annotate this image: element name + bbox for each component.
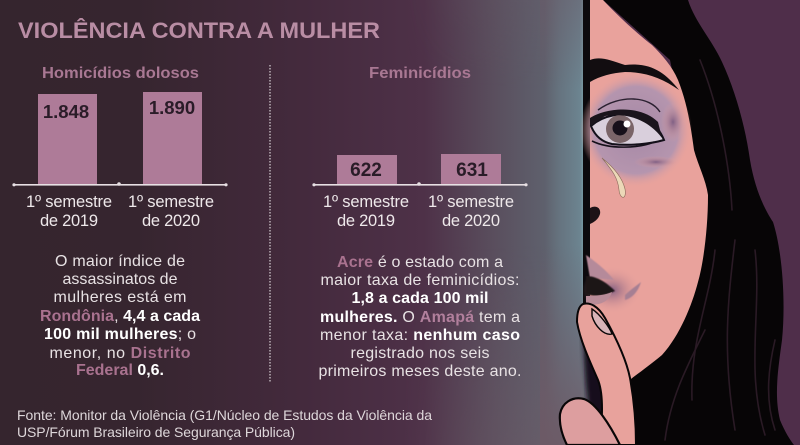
bar chart: 1º semestre — [26, 193, 112, 211]
nose — [590, 207, 600, 224]
text block: menor, no Distrito — [50, 345, 191, 362]
text block: Acre é o estado com a — [337, 254, 503, 271]
bar chart — [312, 154, 528, 230]
text block: Federal 0,6. — [76, 362, 164, 379]
panel: feminicídios — [312, 65, 528, 380]
fingernail — [592, 309, 612, 334]
text block: maior taxa de feminicídios: — [320, 272, 520, 289]
background panel behind illustration — [590, 0, 800, 445]
text block: assassinatos de — [62, 271, 178, 288]
bar chart: 1.890 — [149, 97, 195, 118]
eyebrow — [590, 58, 679, 90]
bar chart: 1º semestre — [428, 193, 514, 211]
text block: registrado nos seis — [350, 345, 490, 362]
bruise under eye — [634, 156, 678, 168]
text block — [40, 253, 200, 379]
bar chart: de 2019 — [337, 212, 395, 230]
heading: Feminicídios — [369, 65, 471, 82]
finger — [577, 304, 636, 445]
hair — [603, 0, 794, 445]
bar chart: de 2020 — [142, 212, 200, 230]
text block: mulheres. O Amapá tem a — [320, 309, 520, 326]
face — [590, 0, 708, 379]
text block: Rondônia, 4,4 a cada — [40, 308, 200, 325]
text block: 1,8 a cada 100 mil — [352, 290, 488, 307]
source note — [17, 407, 432, 440]
bar chart — [12, 92, 228, 230]
eye — [590, 99, 664, 147]
text block: menor taxa: nenhum caso — [320, 327, 520, 344]
divider — [269, 65, 271, 383]
source note: USP/Fórum Brasileiro de Segurança Pública) — [17, 424, 295, 440]
bar chart: 631 — [456, 160, 488, 181]
text block: 100 mil mulheres; o — [44, 326, 196, 343]
door — [540, 0, 590, 445]
mouth with bruise — [582, 255, 642, 314]
bar chart: 1º semestre — [323, 193, 409, 211]
thumb — [560, 398, 620, 445]
tear — [602, 158, 625, 197]
text block: mulheres está em — [54, 289, 186, 306]
heading: Homicídios dolosos — [42, 65, 199, 82]
hair highlights — [665, 60, 775, 440]
dark bruise near temple — [661, 102, 685, 142]
title: VIOLÊNCIA CONTRA A MULHER — [18, 18, 380, 43]
bar chart: de 2020 — [442, 212, 500, 230]
illustration: woman behind a door — [540, 0, 794, 445]
bar chart: 622 — [350, 160, 382, 181]
text block: primeiros meses deste ano. — [318, 363, 522, 380]
text block: O maior índice de — [55, 253, 185, 270]
text block — [318, 254, 522, 380]
bar chart: 1.848 — [43, 101, 89, 122]
source note: Fonte: Monitor da Violência (G1/Núcleo de Estudos da Violência da — [17, 407, 432, 423]
bruise around eye — [580, 72, 692, 188]
finger shadow — [582, 330, 612, 445]
bar chart: 1º semestre — [128, 193, 214, 211]
bar chart: de 2019 — [40, 212, 98, 230]
panel: homicídios dolosos — [12, 65, 228, 379]
